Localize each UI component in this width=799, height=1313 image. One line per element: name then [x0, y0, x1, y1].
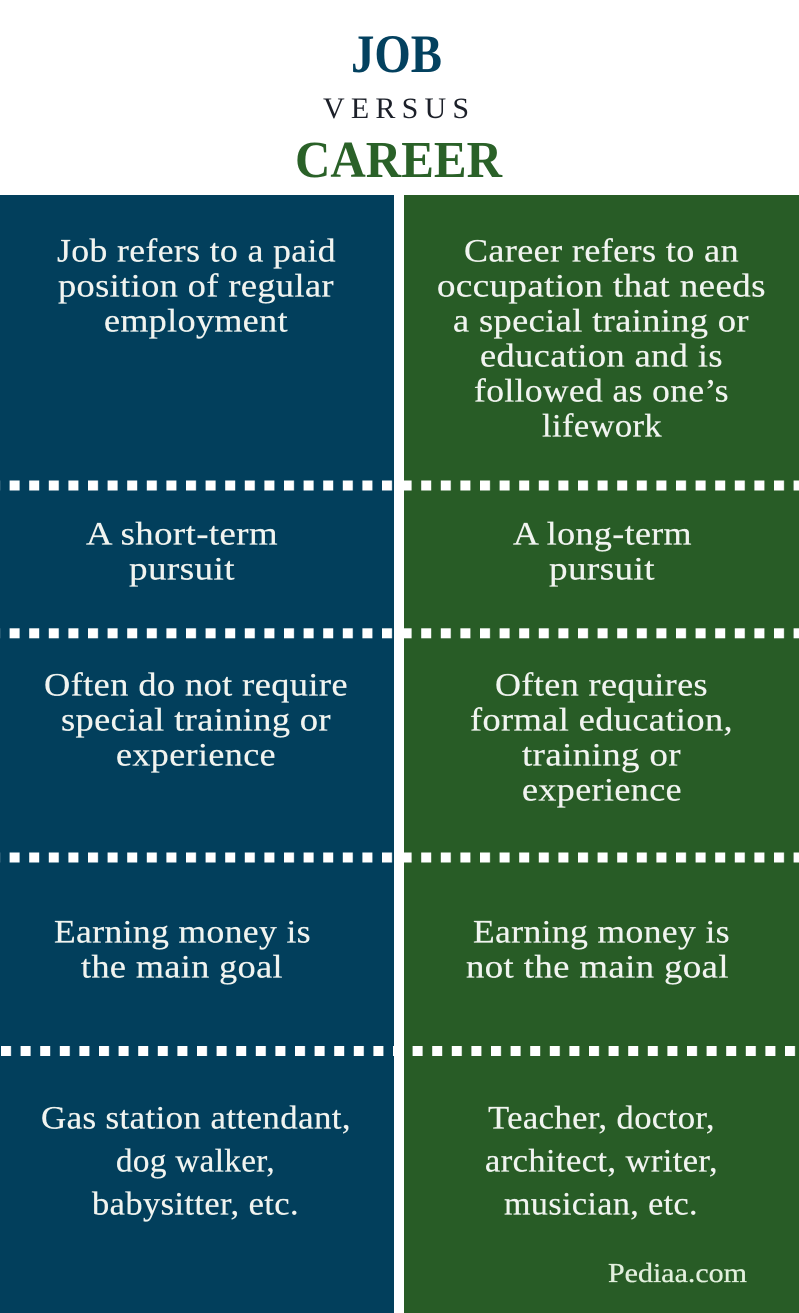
text: career duration: pursuit	[549, 552, 655, 588]
text: job training: Often do not require	[44, 668, 348, 704]
text: career definition	[437, 234, 766, 445]
text: career goal	[466, 915, 730, 986]
text: job examples	[41, 1101, 351, 1223]
text: job definition	[57, 234, 336, 340]
text: career training: training or	[522, 738, 681, 774]
text: career definition: followed as one’s	[474, 374, 729, 410]
text: job definition: employment	[104, 304, 288, 340]
text: career examples: musician, etc.	[504, 1187, 698, 1223]
text: career duration	[513, 517, 692, 588]
heading: career: CAREER	[295, 132, 503, 189]
text: career examples	[485, 1101, 718, 1223]
dotted row dividers	[0, 480, 799, 1056]
text: career definition: education and is	[480, 339, 723, 375]
text: career goal: not the main goal	[466, 950, 729, 986]
text: job examples: babysitter, etc.	[92, 1187, 299, 1223]
text: job goal	[54, 915, 311, 986]
text: job duration: pursuit	[129, 552, 235, 588]
heading: versus: VERSUS	[323, 92, 469, 125]
text: job goal: the main goal	[81, 950, 283, 986]
text: job examples: dog walker,	[116, 1144, 275, 1180]
text: career training: Often requires	[495, 668, 708, 704]
text: job definition: position of regular	[58, 269, 334, 305]
text: career duration: A long-term	[513, 517, 692, 553]
text: job duration	[86, 517, 278, 588]
text: career training: experience	[522, 773, 682, 809]
text: job training: special training or	[61, 703, 331, 739]
text: career goal: Earning money is	[473, 915, 730, 951]
text: job definition: Job refers to a paid	[57, 234, 336, 270]
text: career definition: occupation that needs	[437, 269, 766, 305]
text: job training: experience	[116, 738, 276, 774]
text: job duration: A short-term	[86, 517, 278, 553]
source logo: Pediaa.com	[608, 1258, 747, 1288]
text: career training: formal education,	[470, 703, 733, 739]
text: career definition: Career refers to an	[464, 234, 739, 270]
text: career training	[470, 668, 733, 809]
text: career definition: lifework	[542, 409, 662, 445]
text: career definition: a special training or	[453, 304, 749, 340]
panel: career column	[404, 195, 799, 1313]
text: job examples: Gas station attendant,	[41, 1101, 351, 1137]
text: job training	[44, 668, 348, 774]
text: career examples: architect, writer,	[485, 1144, 718, 1180]
heading: job: JOB	[351, 24, 442, 84]
title	[295, 24, 503, 189]
text: job goal: Earning money is	[54, 915, 311, 951]
panel: job column	[0, 195, 394, 1313]
text: career examples: Teacher, doctor,	[488, 1101, 715, 1137]
